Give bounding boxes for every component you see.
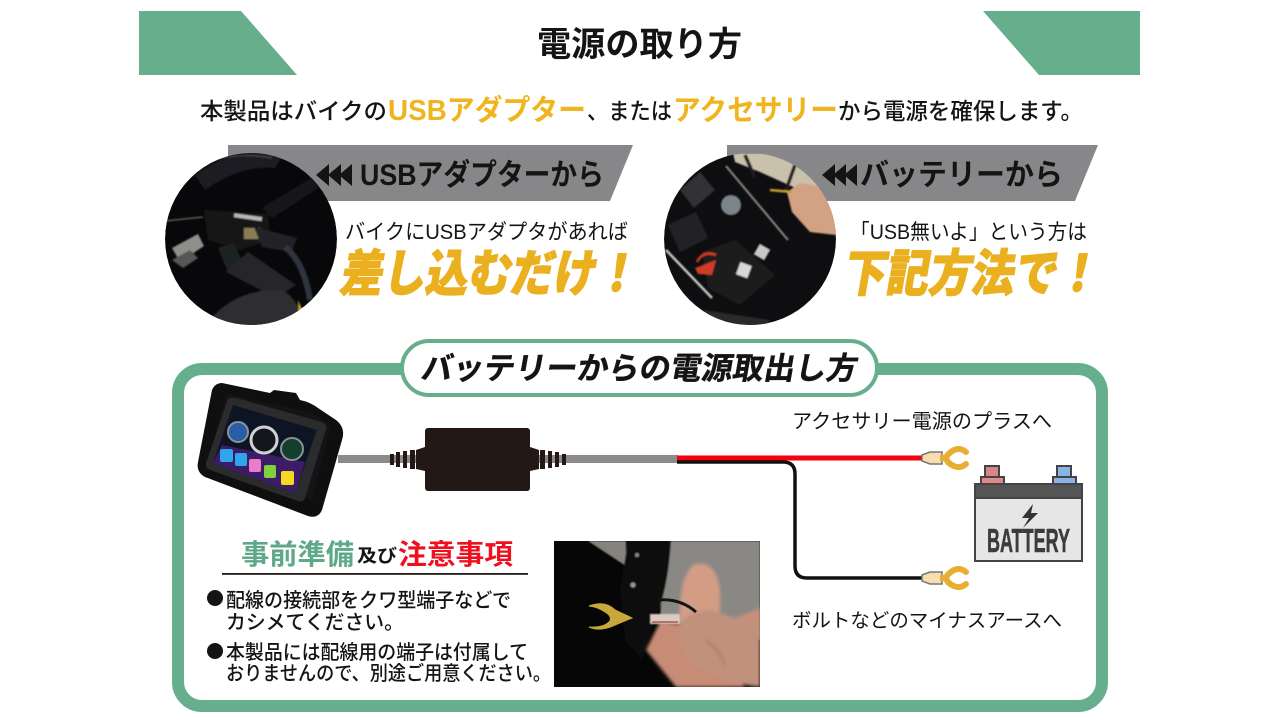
heading band: USB adapter <box>228 145 633 201</box>
label: accessory power plus: アクセサリー電源のプラスへ <box>792 410 1052 433</box>
photo: fork terminal in fingers <box>554 541 760 687</box>
decorative banner: top right <box>983 11 1140 75</box>
inline module box <box>390 428 566 491</box>
intro sentence: 、または <box>587 98 672 124</box>
device: display unit <box>198 383 343 517</box>
notes heading: 及び <box>357 546 397 566</box>
title: 電源の取り方 <box>537 26 742 64</box>
label: bolt minus earth: ボルトなどのマイナスアースへ <box>792 610 1062 632</box>
panel: USB adapter <box>165 145 645 332</box>
note 2 <box>207 641 551 685</box>
icon: battery: BATTERY <box>987 522 1070 559</box>
photo: battery compartment <box>664 153 836 335</box>
note 1: カシメてください。 <box>226 612 404 634</box>
band label: バッテリーから <box>860 159 1063 192</box>
note 2: おりませんので、別途ご用意ください。 <box>226 662 551 685</box>
emphasis text: 下記方法で！ <box>840 245 1106 302</box>
decorative banner: top left <box>139 11 297 75</box>
caption: バイクにUSBアダプタがあれば <box>345 221 628 244</box>
note 1 <box>207 589 511 634</box>
panel: battery <box>664 145 1106 335</box>
icon: battery <box>975 466 1082 561</box>
panel frame <box>178 369 1102 706</box>
wire: red positive <box>677 456 922 460</box>
band label: USBアダプターから <box>360 158 604 192</box>
intro sentence <box>200 93 1083 127</box>
intro sentence: 本製品はバイクの <box>200 98 387 124</box>
intro sentence: USBアダプター <box>388 93 586 127</box>
emphasis text: 差し込むだけ！ <box>337 245 645 302</box>
notes heading <box>222 539 528 575</box>
note 2: 本製品には配線用の端子は付属して <box>226 641 528 664</box>
note 1: 配線の接続部をクワ型端子などで <box>226 589 511 612</box>
intro sentence: から電源を確保します。 <box>838 98 1083 124</box>
triple arrow icon <box>822 164 857 186</box>
panel heading pill <box>402 341 877 395</box>
heading band: battery <box>727 145 1098 201</box>
cable: grey <box>338 455 678 463</box>
wire: black negative <box>677 462 922 578</box>
intro sentence: アクセサリー <box>673 95 838 127</box>
terminal: negative <box>922 569 966 587</box>
notes heading: 注意事項 <box>398 539 513 570</box>
notes heading: 事前準備 <box>241 539 354 570</box>
panel heading pill: バッテリーからの電源取出し方 <box>419 351 861 386</box>
triple arrow icon <box>316 164 352 186</box>
terminal: positive <box>922 449 966 467</box>
caption: 「USB無いよ」という方は <box>850 221 1087 244</box>
photo: USB adapter on bike <box>165 152 337 332</box>
panel: how to take power from battery <box>178 341 1102 706</box>
